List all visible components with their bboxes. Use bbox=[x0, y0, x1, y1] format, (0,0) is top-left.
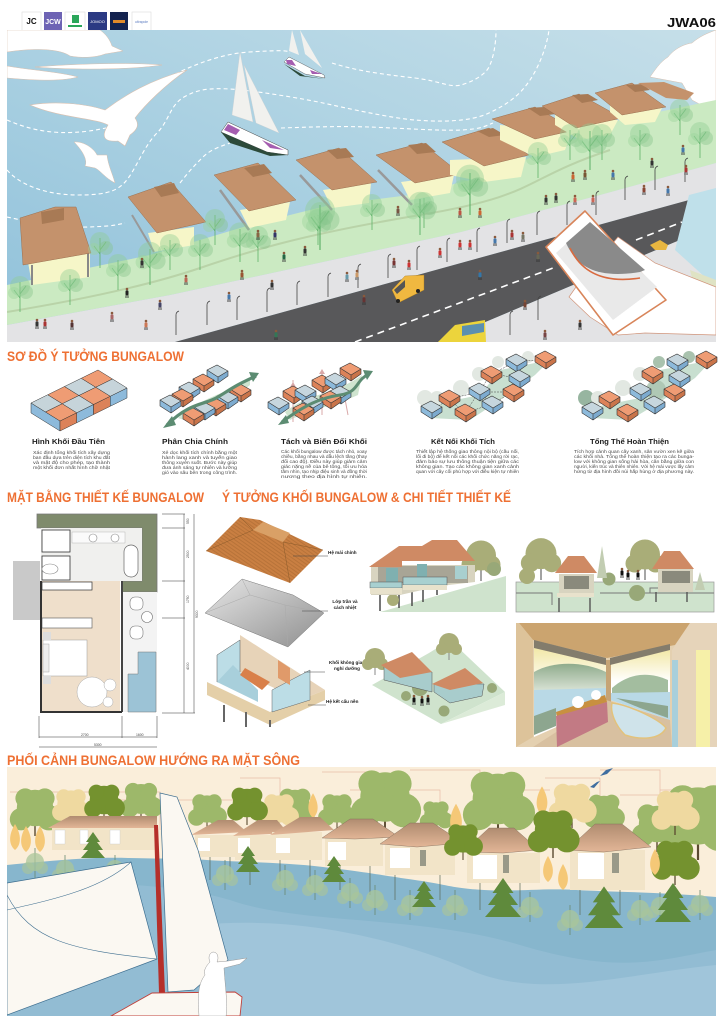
heading: floor plan: MẶT BẰNG THIẾT KẾ BUNGALOW bbox=[7, 488, 205, 505]
dimensions bbox=[39, 514, 195, 747]
text: step 4: quan với cây cối phù hợp với điều kiện tự nhiên bbox=[416, 469, 520, 474]
floor plan: 4000 bbox=[186, 662, 190, 670]
text: step 2 bbox=[162, 437, 238, 475]
label: living space: Khối không gian bbox=[329, 659, 365, 665]
text: step 1: Hình Khối Đầu Tiên bbox=[32, 437, 105, 446]
bungalows bbox=[20, 82, 694, 285]
tall sail bbox=[160, 793, 228, 992]
drawing: section through site bbox=[516, 538, 714, 612]
text: step 2: thông xuyên suốt. Bước này giúp bbox=[162, 460, 238, 465]
logo: green bbox=[65, 12, 85, 31]
text: step 3: giác nặng nề của bê tông, tối ưu hóa bbox=[281, 464, 368, 469]
reflections and pines bbox=[22, 832, 713, 935]
people bbox=[36, 145, 688, 340]
heading: river perspective: PHỐI CẢNH BUNGALOW HƯỚNG RA MẶT SÔNG bbox=[7, 751, 300, 768]
text: step 3: Tách và Biến Đổi Khối bbox=[281, 437, 367, 446]
text: step 5: low với không gian sống hài hòa, cân bằng giữa con bbox=[574, 459, 695, 464]
floor plan: 2500 bbox=[186, 550, 190, 558]
label: ceiling: cách nhiệt bbox=[334, 605, 357, 610]
birds bbox=[590, 768, 613, 788]
left window bbox=[534, 648, 606, 737]
text: step 1 bbox=[32, 437, 111, 470]
text: step 5: hứng từ địa hình đồi núi hấp hùng ở địa phương này. bbox=[574, 469, 694, 474]
label: living space: nghỉ dưỡng bbox=[334, 666, 360, 671]
text: step 3: đổi cao độ). Điều này giúp giảm cảm bbox=[281, 459, 368, 464]
label: ceiling bbox=[332, 599, 358, 610]
text: step 3 bbox=[281, 437, 368, 479]
text: step 4 bbox=[416, 437, 520, 474]
drawing: interior render bbox=[516, 623, 717, 747]
grey deck bbox=[13, 561, 40, 620]
road bbox=[175, 200, 689, 342]
far canopy: dark green bbox=[84, 785, 268, 825]
ceiling layer bbox=[205, 579, 324, 647]
text: step 4: lối đi bộ) để kết nối các khối chức năng rời rạc, bbox=[416, 454, 519, 459]
logo: dark navy bbox=[110, 12, 128, 31]
walk path bbox=[7, 150, 610, 312]
leader lines bbox=[293, 556, 328, 705]
water bbox=[7, 858, 716, 1016]
label: ceiling: Lớp trần và bbox=[332, 599, 358, 604]
yellow van bbox=[392, 275, 424, 303]
terrace bbox=[123, 592, 157, 712]
left sail bbox=[7, 862, 157, 1015]
floor plan: 5300 bbox=[94, 743, 102, 747]
text: step 3: nương theo địa hình tự nhiên. bbox=[281, 474, 367, 479]
panel: hero aerial view bbox=[7, 30, 716, 342]
sky bbox=[7, 767, 716, 1016]
yellow car bbox=[650, 240, 668, 250]
right window bbox=[610, 650, 670, 720]
floor plan: 9300 bbox=[195, 610, 199, 618]
yellow bus bbox=[438, 320, 486, 342]
stilts bbox=[210, 857, 620, 915]
diagram 4: connect masses bbox=[417, 351, 556, 422]
label: main roof: Hệ mái chính bbox=[328, 550, 357, 555]
foreground trees bbox=[444, 810, 700, 890]
ceiling bbox=[519, 623, 690, 658]
phone bbox=[546, 211, 666, 335]
person bbox=[198, 952, 247, 1016]
mast bbox=[154, 825, 165, 993]
hand bbox=[569, 237, 716, 335]
bed bbox=[43, 640, 87, 676]
text: step 3: chiều, bằng nhau và dẫu lệch tầng (thay bbox=[281, 454, 368, 459]
logo row bbox=[22, 12, 151, 31]
seagull large bbox=[30, 70, 187, 146]
bathroom bbox=[41, 528, 142, 581]
text: step 5 bbox=[574, 437, 695, 474]
floor plan: 1600 bbox=[136, 733, 144, 737]
left wall bbox=[516, 623, 533, 747]
logo: JOMOO: JOMOO bbox=[90, 19, 105, 24]
bungalows bbox=[48, 816, 651, 890]
hull bbox=[111, 992, 242, 1016]
heading: massing concept: Ý TƯỞNG KHỐI BUNGALOW & CHI TIẾT THIẾT KẾ bbox=[222, 488, 511, 505]
living module bbox=[207, 635, 325, 727]
land: green promenade bbox=[7, 100, 716, 325]
main room floor bbox=[41, 581, 120, 712]
seagull small bbox=[74, 142, 115, 183]
diagram 3: split and transform bbox=[268, 363, 373, 425]
text: step 5: người, kiến trúc và thiên nhiên. Với hệ mái vược lấy cảm bbox=[574, 464, 694, 469]
text: step 1: một khối đơn nhất hình chữ nhật bbox=[33, 465, 111, 470]
text: step 2: Phân Chia Chính bbox=[162, 437, 228, 446]
text: step 4: không gian. Tạo các không gian xanh cảnh bbox=[416, 464, 520, 469]
panel: river perspective bbox=[7, 767, 716, 1016]
floor plan: 2700 bbox=[81, 733, 89, 737]
phone screen map bbox=[556, 222, 657, 320]
floor plan bbox=[13, 514, 199, 747]
water bbox=[7, 30, 716, 342]
clouds bbox=[7, 30, 716, 113]
right wall and door bbox=[672, 623, 717, 747]
text: step 2: gió vào sâu bên trong công trình. bbox=[162, 470, 237, 475]
text: step 2: Xẻ dọc khối tích chính bằng một bbox=[162, 450, 238, 455]
label: foundation: Hệ kết cấu nền bbox=[326, 698, 359, 704]
text: step 1: Xác định tổng khối tích xây dựng bbox=[33, 450, 111, 455]
rug and chairs bbox=[77, 677, 116, 707]
floor plan: 1750 bbox=[186, 595, 190, 603]
hand holding phone bbox=[546, 211, 716, 335]
text: step 3: Các khối bungalow được tách nhỏ, xoay bbox=[281, 449, 368, 454]
drawing: isometric site bbox=[362, 633, 505, 724]
diagram 2: main division bbox=[160, 365, 259, 428]
diagram 5: completed whole bbox=[578, 351, 717, 422]
far sidewalk and river bbox=[438, 240, 716, 342]
text: step 2: đưa ánh sáng tự nhiên và lưỡng bbox=[162, 465, 238, 470]
text: step 5: Tổng Thể Hoàn Thiện bbox=[590, 437, 669, 446]
boat small bbox=[284, 30, 325, 79]
background city outlines bbox=[10, 770, 716, 830]
bathtub bbox=[612, 703, 666, 738]
text: step 5: Tích hợp cảnh quan cây xanh, sân vườn xen kẽ giữa bbox=[574, 449, 695, 454]
exploded axonometric bbox=[205, 517, 365, 727]
vanity bbox=[556, 695, 607, 718]
text: step 4: Kết Nối Khối Tích bbox=[431, 437, 495, 446]
far canopy: pale yellow bbox=[52, 784, 700, 835]
planter bbox=[37, 514, 157, 592]
main roof bbox=[206, 517, 323, 583]
text: step 5: các khối nhà. Tổng thể hoàn thiện tạo ra các bunga- bbox=[574, 454, 695, 459]
diagram 1: initial massing bbox=[31, 370, 127, 431]
logo: white: ultrapole bbox=[135, 20, 148, 24]
project code: JWA06 bbox=[667, 15, 716, 30]
text: step 4: Thiết lập hệ thống giao thông nội bộ (cầu nối, bbox=[416, 449, 519, 454]
logo: JC: JC bbox=[26, 17, 37, 26]
text: step 1: và mật độ cho phép, tạo thành bbox=[33, 460, 111, 465]
text: step 4: đảm bảo sự lưu thông thuận tiện giữa các bbox=[416, 459, 520, 464]
heading: section 1: SƠ ĐỒ Ý TƯỞNG BUNGALOW bbox=[7, 347, 185, 364]
sidewalk bbox=[7, 163, 716, 342]
floor plan: 550 bbox=[186, 518, 190, 524]
dashed river lines bbox=[7, 30, 549, 227]
text: step 2: hành lang xanh và tuyến giao bbox=[162, 455, 238, 460]
label: living space bbox=[329, 659, 365, 671]
floor bbox=[533, 700, 672, 747]
slim yellow trees bbox=[10, 786, 547, 852]
trees along promenade bbox=[8, 99, 713, 312]
logo: JCW: JCW bbox=[45, 19, 61, 26]
far canopy: light green bbox=[10, 770, 723, 860]
text: step 1: ban đầu dựa trên diện tích khu đất bbox=[33, 455, 111, 460]
drawing: hillside house bbox=[369, 540, 506, 612]
boat large bbox=[221, 52, 288, 156]
lamp posts bbox=[176, 158, 688, 335]
pool bbox=[128, 652, 156, 712]
text: step 3: tầm nhìn, tạo nhịp điệu sinh và đồng thời bbox=[281, 469, 367, 474]
